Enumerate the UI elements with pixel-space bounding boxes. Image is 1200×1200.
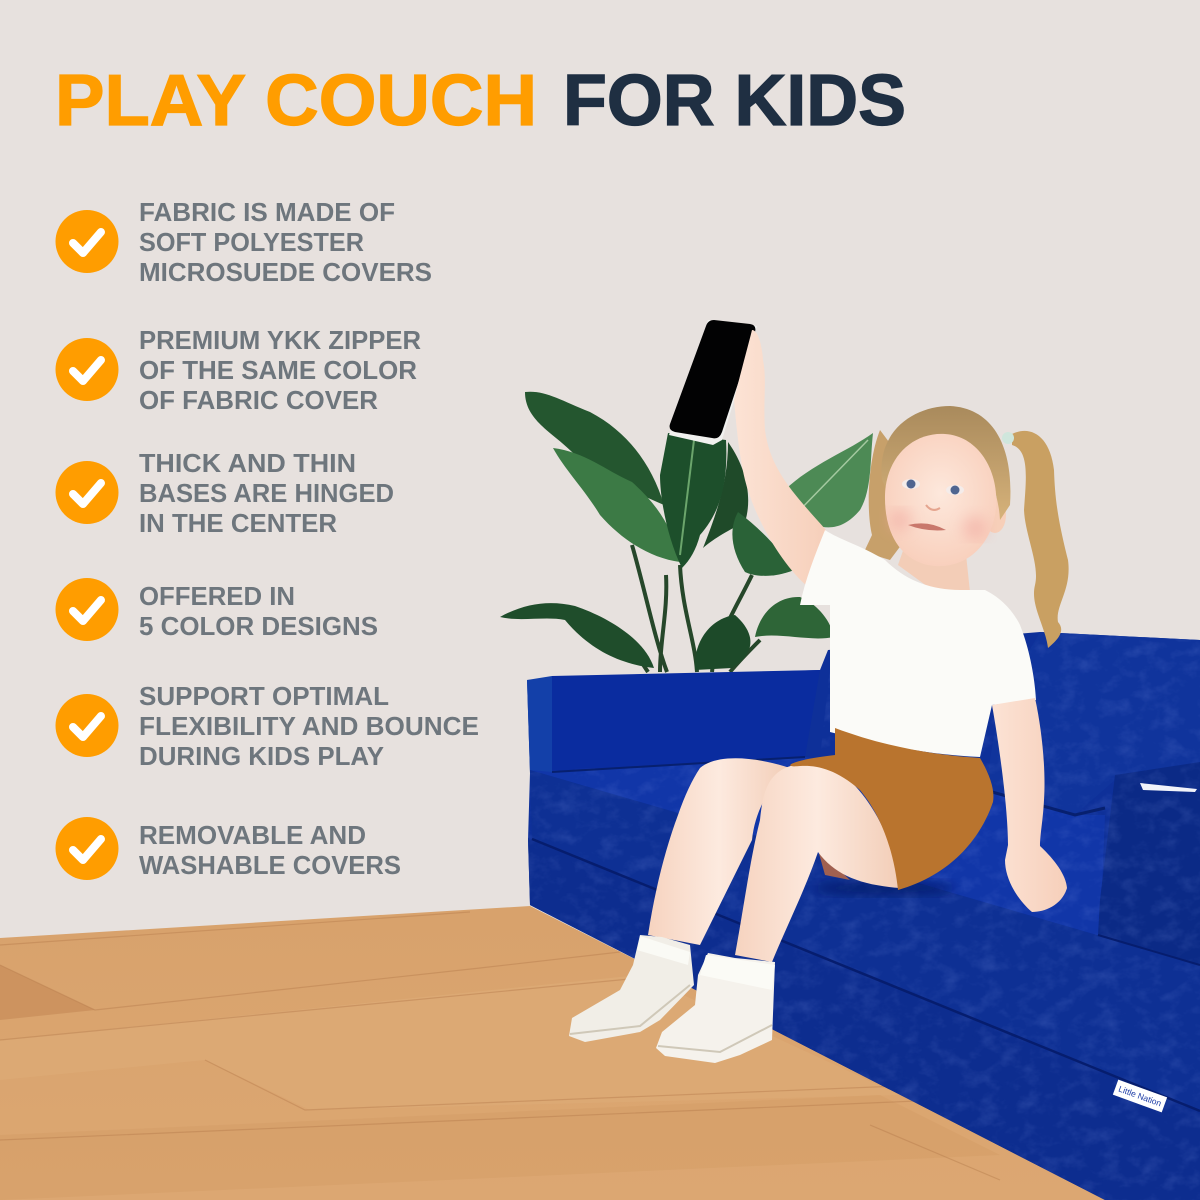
feature: fabric — [56, 197, 432, 287]
brand tag — [1113, 1080, 1167, 1112]
shadow under skirt — [815, 880, 955, 896]
seat upper block — [530, 770, 1200, 1112]
leaf low right — [755, 597, 834, 638]
feature: fabric: SOFT POLYESTER — [139, 227, 364, 257]
right leg — [735, 764, 900, 962]
feature: covers: REMOVABLE AND — [139, 820, 366, 850]
tag on cube — [1140, 783, 1197, 792]
lowered arm — [992, 698, 1067, 912]
feature: bases: THICK AND THIN — [139, 448, 356, 478]
feature: fabric: MICROSUEDE COVERS — [139, 257, 432, 287]
girl — [569, 330, 1069, 1063]
cheeks — [889, 509, 987, 540]
feature: bases: BASES ARE HINGED — [139, 478, 394, 508]
feature: bases: IN THE CENTER — [139, 508, 337, 538]
hair cap — [881, 406, 1010, 520]
neck — [898, 545, 970, 592]
title — [55, 61, 906, 141]
leaf low mid — [695, 615, 750, 670]
mouth — [908, 523, 946, 530]
right eye — [946, 485, 964, 495]
face — [885, 434, 996, 566]
feature list — [56, 197, 479, 880]
feature: zipper: OF FABRIC COVER — [139, 385, 378, 415]
seat top — [530, 757, 1200, 965]
phone — [669, 320, 757, 445]
velvet texture — [528, 634, 1200, 1200]
ear — [984, 497, 1006, 533]
seat lower block — [528, 838, 1200, 1200]
feature: bases — [56, 448, 394, 538]
wooden floor — [0, 906, 1110, 1200]
left leg — [648, 758, 790, 945]
blue sofa — [527, 632, 1200, 1200]
feature: flexibility: FLEXIBILITY AND BOUNCE — [139, 711, 479, 741]
nose — [926, 505, 940, 510]
title: FOR KIDS — [563, 61, 906, 141]
leaf right small — [732, 512, 794, 576]
leaf right large — [785, 433, 873, 527]
feature: flexibility: DURING KIDS PLAY — [139, 741, 384, 771]
brand tag: Little Nation — [1117, 1084, 1163, 1108]
sofa silhouette — [527, 632, 1200, 1200]
feature: zipper: PREMIUM YKK ZIPPER — [139, 325, 421, 355]
back cushion right — [985, 632, 1200, 815]
right shoe — [656, 953, 775, 1063]
left eye — [902, 479, 920, 489]
shirt — [800, 530, 1036, 757]
leaf behind center — [703, 442, 748, 548]
feature: fabric: FABRIC IS MADE OF — [139, 197, 395, 227]
feature: colors: 5 COLOR DESIGNS — [139, 611, 378, 641]
skirt — [790, 728, 993, 890]
feature: zipper: OF THE SAME COLOR — [139, 355, 417, 385]
leaf mid left — [553, 448, 680, 562]
underside shadow — [818, 850, 850, 880]
leaf center — [660, 433, 726, 568]
feature: colors — [56, 578, 378, 641]
feature: flexibility: SUPPORT OPTIMAL — [139, 681, 389, 711]
feature: covers — [56, 817, 401, 880]
hair tie — [1002, 432, 1014, 444]
hair left pigtail — [864, 430, 905, 560]
feature: covers: WASHABLE COVERS — [139, 850, 401, 880]
plant — [500, 392, 873, 672]
feature: colors: OFFERED IN — [139, 581, 295, 611]
arm cushion side — [527, 676, 552, 773]
title: PLAY COUCH — [55, 61, 537, 141]
arm cushion — [552, 670, 820, 772]
leaf low left — [500, 603, 654, 668]
right pigtail — [1012, 431, 1069, 648]
leaf upper left — [525, 392, 664, 505]
feature: zipper — [56, 325, 421, 415]
left shoe — [569, 935, 694, 1042]
feature: flexibility — [56, 681, 479, 771]
cube cushion — [1098, 762, 1200, 965]
raised arm — [734, 330, 826, 590]
